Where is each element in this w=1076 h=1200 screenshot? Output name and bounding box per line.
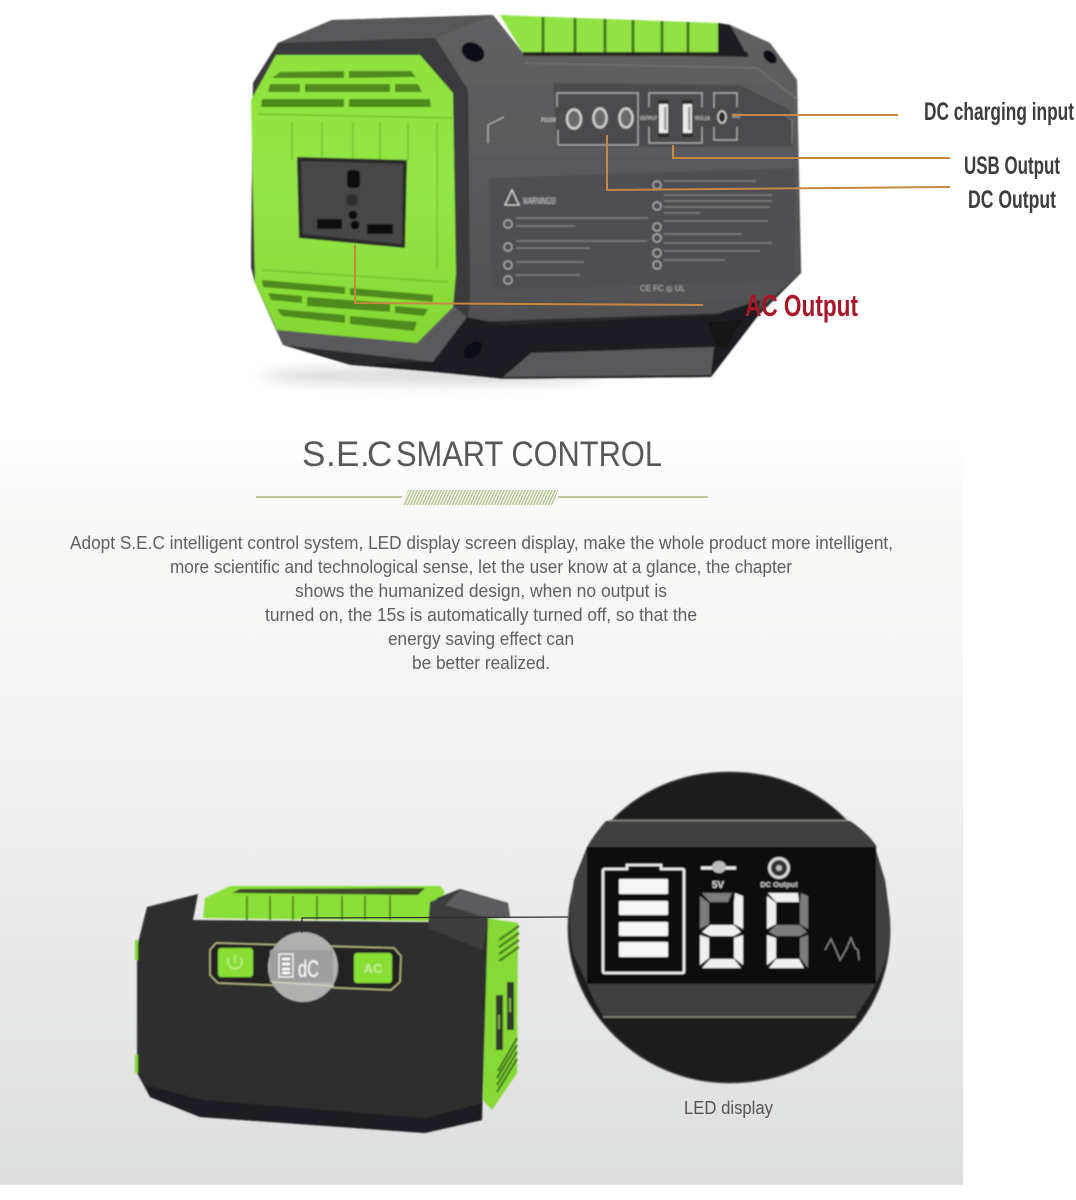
DC output ports (567, 108, 632, 128)
mounting holes (458, 38, 779, 362)
description text: shows the humanized design, when no output is (295, 580, 667, 601)
warning icons (504, 181, 661, 284)
USB ports (658, 100, 693, 137)
port frames (488, 93, 792, 145)
side highlight ledge (525, 63, 798, 100)
grey band top (587, 821, 877, 847)
background panel (0, 440, 963, 1185)
DC output icon (760, 858, 798, 889)
warning text lines (516, 181, 772, 275)
description text: Adopt S.E.C intelligent control system, LED display screen display, make the whole product more intelligent, (70, 532, 893, 553)
product photo: power station side view (251, 15, 801, 385)
green side tabs (135, 940, 138, 1073)
certification marks: CE FC ◎ UL (640, 284, 686, 293)
control frame (210, 943, 401, 990)
title: S.E.C (302, 435, 392, 474)
band lines (603, 820, 856, 1017)
magnifier lens: dC (298, 956, 319, 983)
label: AC Output: AC Output (745, 288, 858, 323)
grey band bottom (587, 984, 876, 1016)
title (302, 435, 662, 474)
green front panel (251, 55, 456, 343)
top right highlight (445, 890, 510, 918)
AC button (354, 953, 392, 983)
description text (70, 532, 893, 673)
front top cap (278, 15, 493, 43)
zoomed LED display (568, 772, 890, 1083)
connector line (302, 917, 568, 933)
green side panel (483, 918, 518, 1110)
port tiny labels: 5V/2.1A (695, 116, 710, 122)
magnifier lens (268, 932, 338, 1002)
AC button: AC (364, 961, 383, 976)
title divider (256, 490, 708, 505)
power button (218, 948, 253, 977)
lower facet (503, 347, 714, 377)
description text: more scientific and technological sense, let the user know at a glance, the chapter (170, 556, 792, 577)
waveform icon (825, 938, 859, 960)
bottom vents (262, 280, 433, 331)
description text: turned on, the 15s is automatically turned off, so that the (265, 604, 697, 625)
port tiny labels: PS15W (541, 118, 556, 124)
DC output icon: DC Output (760, 880, 798, 889)
AC socket (297, 157, 407, 248)
description text: be better realized. (412, 652, 550, 673)
port tiny labels (541, 114, 741, 124)
product photo: power station front view (135, 886, 519, 1133)
panel edges and ribs (258, 114, 452, 282)
warning panel (489, 168, 795, 290)
side USB slots (496, 982, 514, 1050)
top handle (203, 886, 445, 921)
control strip (553, 83, 792, 147)
port tiny labels: OUTPUT (640, 116, 657, 122)
side face (435, 15, 800, 322)
caption: LED display: LED display (684, 1098, 773, 1118)
lens body (568, 772, 890, 1083)
bottom notch (708, 320, 742, 348)
title: SMART CONTROL (396, 435, 662, 474)
side vents (497, 926, 519, 1092)
top right chamfer (428, 890, 510, 950)
top vents (261, 71, 431, 107)
warning heading: WARNINGS! (523, 196, 556, 206)
front frame lower band (255, 283, 467, 362)
front frame (251, 36, 470, 362)
leader lines (355, 115, 950, 305)
battery icon (603, 865, 684, 973)
warning heading (505, 190, 556, 206)
device body (137, 889, 509, 1133)
seven segment digit d (700, 893, 743, 968)
side fill (570, 847, 889, 984)
carrying handle (500, 15, 748, 57)
black screen (587, 847, 876, 984)
bottom band (145, 1085, 482, 1133)
ground shadow (260, 367, 600, 385)
seven segment digit C (767, 893, 808, 968)
DC input port (718, 111, 726, 123)
device body (251, 15, 801, 379)
bottom chamfer (350, 300, 760, 379)
description text: energy saving effect can (388, 628, 574, 649)
port tiny labels: INPUT (732, 114, 741, 120)
USB icon: 5V (712, 880, 724, 891)
USB icon (701, 861, 736, 891)
